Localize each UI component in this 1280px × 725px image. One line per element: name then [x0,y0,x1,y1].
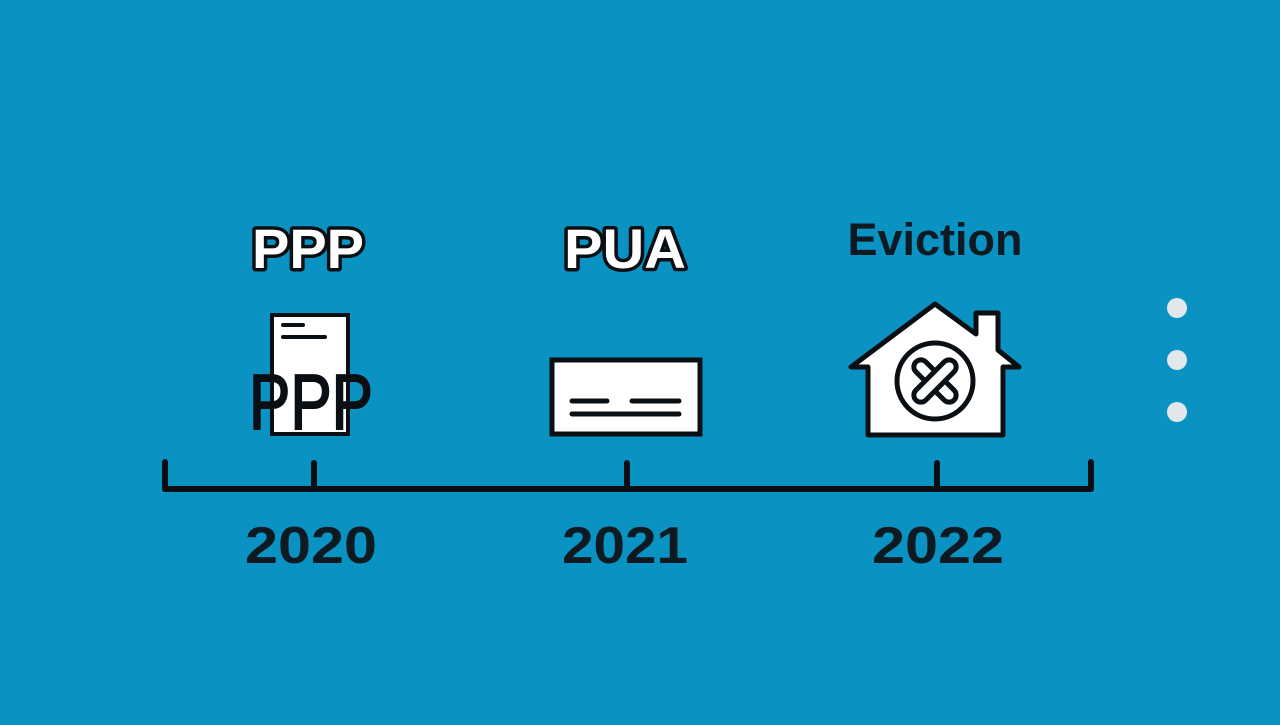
title: Eviction: Eviction [847,214,1023,265]
year labels: 2022 [872,517,1004,575]
icon: PUA check [552,360,700,434]
icon: house with X [851,304,1019,435]
title: PUA: PUA [564,217,686,280]
title: PPP: PPP [252,217,364,280]
continuation dots [1167,298,1187,422]
timeline axis [165,462,1091,489]
year labels: 2021 [562,517,688,575]
icon: PPP document: PPP [249,358,373,446]
icon: PPP document [249,315,373,446]
year labels: 2020 [245,517,377,575]
year labels [245,517,1004,575]
